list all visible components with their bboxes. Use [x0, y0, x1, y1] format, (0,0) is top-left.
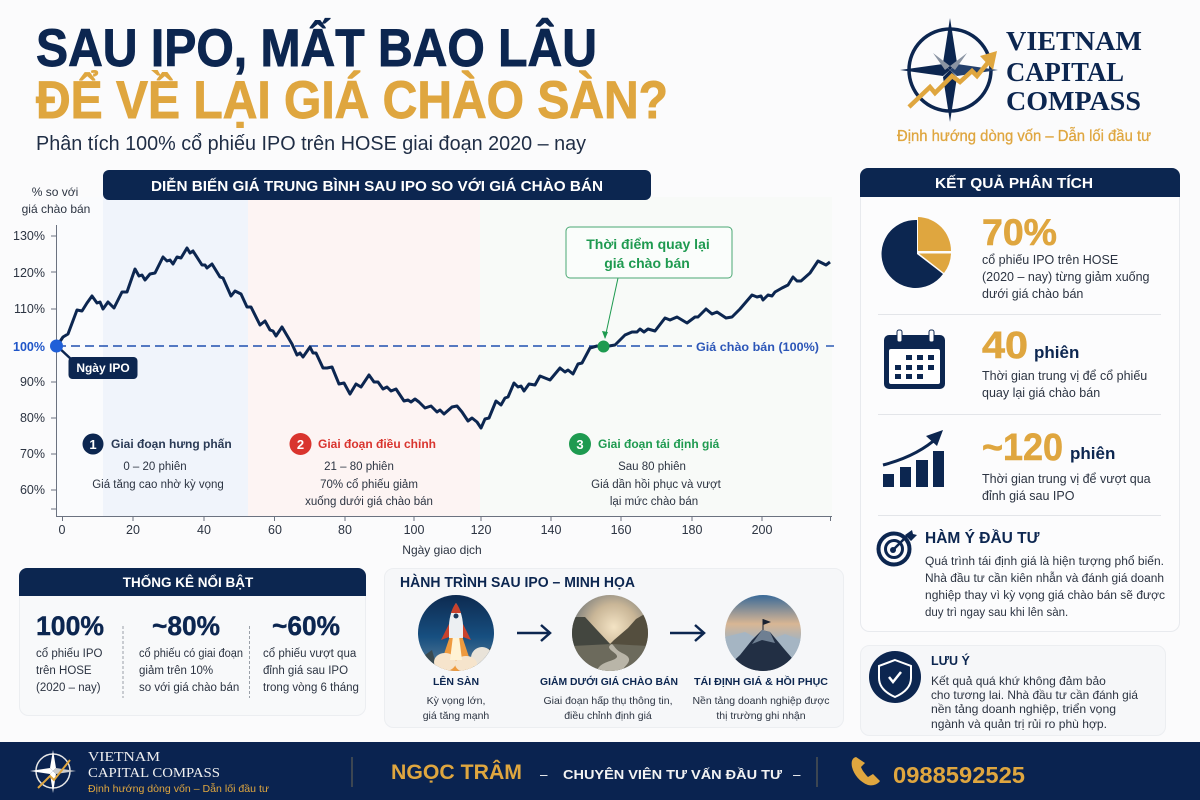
phase 2: xuống dưới giá chào bán — [305, 496, 433, 508]
x axis labels: 180 — [682, 523, 702, 537]
illustration: mountain summit flag — [722, 595, 804, 672]
y axis labels — [13, 229, 45, 497]
stat: 60%: ~60% — [272, 611, 340, 641]
stat: 80%: cổ phiếu có giai đoạn — [139, 648, 243, 660]
y axis title — [22, 185, 90, 216]
phone number: 0988592525 — [893, 762, 1025, 788]
step: revaluation and recovery: Nền tảng doanh nghiệp được — [692, 695, 830, 707]
phase 2: 70% cổ phiếu giảm — [320, 479, 418, 491]
step: listing: giá tăng mạnh — [423, 710, 489, 722]
icon: calendar — [884, 330, 945, 389]
findings heading: KẾT QUẢ PHÂN TÍCH — [935, 174, 1093, 192]
stat: 80%: giảm trên 10% — [139, 665, 213, 677]
investment implications: nghiệp thay vì kỳ vọng giá chào bán sẽ được — [925, 590, 1165, 602]
panel: disclaimer note: Kết quả quá khứ không đảm bảo — [931, 674, 1106, 688]
phase 3: Giá dần hồi phục và vượt — [591, 479, 722, 491]
stat: 60%: cổ phiếu vượt qua — [263, 648, 357, 660]
x axis labels: 20 — [126, 523, 140, 537]
x axis labels: 100 — [404, 523, 424, 537]
callout: return to offer price: giá chào bán — [604, 255, 690, 271]
marker: IPO day: Ngày IPO — [76, 361, 130, 375]
step: revaluation and recovery — [692, 675, 830, 722]
phase background bands — [57, 197, 832, 516]
illustration: valley road — [572, 595, 648, 672]
findings heading — [860, 168, 1180, 197]
logo: Vietnam Capital Compass — [897, 18, 1151, 145]
title: SAU IPO, MẤT BAO LÂU — [36, 17, 597, 78]
panel: disclaimer note: nền tảng doanh nghiệp, triển vọng — [931, 702, 1116, 716]
stat: 60% — [263, 611, 359, 694]
chart heading: DIỄN BIẾN GIÁ TRUNG BÌNH SAU IPO SO VỚI GIÁ CHÀO BÁN — [151, 177, 603, 195]
finding: 70%: (2020 – nay) từng giảm xuống — [982, 270, 1150, 284]
advisor role: CHUYÊN VIÊN TƯ VẤN ĐẦU TƯ — [563, 767, 782, 782]
stat: 60%: đỉnh giá sau IPO — [263, 665, 348, 677]
step: drop below offer price: GIẢM DƯỚI GIÁ CHÀO BÁN — [540, 675, 678, 688]
x axis labels: 60 — [268, 523, 282, 537]
investment implications — [878, 529, 1165, 619]
panel: post-IPO journey — [384, 568, 844, 728]
subtitle: Phân tích 100% cổ phiếu IPO trên HOSE giai đoạn 2020 – nay — [36, 133, 586, 155]
x axis labels: 160 — [611, 523, 631, 537]
finding: 120 sessions: phiên — [1070, 444, 1115, 463]
price line — [57, 248, 830, 428]
phase 3: 3 — [576, 437, 584, 452]
panel: highlighted statistics — [19, 568, 366, 716]
icon: compass with rising arrow — [900, 18, 998, 122]
finding: 40 sessions: Thời gian trung vị để cổ phiếu — [982, 369, 1147, 383]
x axis labels: 140 — [541, 523, 561, 537]
stat: 100%: (2020 – nay) — [36, 682, 101, 694]
finding: 70%: 70% — [982, 212, 1057, 253]
panel: disclaimer note: LƯU Ý — [931, 653, 971, 668]
x axis labels: 40 — [197, 523, 211, 537]
phase 1: 0 – 20 phiên — [123, 461, 187, 473]
x axis labels: 80 — [338, 523, 352, 537]
phase 3 — [569, 433, 722, 508]
x axis labels: 120 — [471, 523, 491, 537]
finding: 120 sessions — [883, 427, 1151, 503]
footer logo: VIETNAM — [88, 749, 160, 764]
finding: 40 sessions: 40 — [982, 325, 1028, 367]
statistics heading: THỐNG KÊ NỔI BẬT — [123, 575, 254, 590]
icon: shield — [869, 651, 921, 703]
stat: 80%: so với giá chào bán — [139, 682, 239, 694]
phase 1: Giá tăng cao nhờ kỳ vọng — [92, 479, 224, 491]
advisor role: – — [540, 767, 548, 782]
arrow — [670, 625, 704, 641]
icon: phone — [852, 757, 880, 785]
logo wordmark: VIETNAM — [1006, 26, 1142, 56]
icon: pie chart — [882, 217, 951, 288]
x axis labels: 0 — [59, 523, 66, 537]
logo wordmark — [1006, 26, 1142, 116]
phase 3: Giai đoạn tái định giá — [598, 437, 720, 451]
phase 3: lại mức chào bán — [610, 496, 698, 508]
investment implications: HÀM Ý ĐẦU TƯ — [925, 529, 1040, 547]
chart: average price after IPO — [13, 170, 834, 557]
logo wordmark: COMPASS — [1006, 86, 1141, 116]
footer logo — [30, 749, 269, 795]
y axis title: giá chào bán — [22, 202, 90, 216]
step: listing — [423, 675, 489, 722]
phase 3: Sau 80 phiên — [618, 461, 686, 473]
illustration: rocket launch — [418, 595, 494, 672]
callout: return to offer price: Thời điểm quay lại — [586, 236, 710, 252]
phase 1: 1 — [89, 437, 97, 452]
stat: 80%: ~80% — [152, 611, 220, 641]
step: listing: LÊN SÀN — [433, 675, 479, 688]
finding: 70%: cổ phiếu IPO trên HOSE — [982, 253, 1118, 267]
stat: 100% — [36, 611, 104, 694]
panel: disclaimer note: cho tương lai. Nhà đầu tư cần đánh giá — [931, 688, 1138, 702]
finding: 120 sessions: ~120 — [982, 427, 1063, 469]
panel: disclaimer note: ngành và quản trị rủi ro phù hợp. — [931, 717, 1107, 731]
step: drop below offer price: điều chỉnh định giá — [564, 710, 652, 722]
arrow — [517, 625, 550, 641]
marker: IPO day — [50, 340, 138, 379]
icon: target — [878, 530, 917, 564]
callout: return to offer price — [566, 227, 732, 352]
logo tagline: Định hướng dòng vốn – Dẫn lối đầu tư — [897, 128, 1151, 145]
stat: 100%: trên HOSE — [36, 665, 92, 677]
y axis labels: 100% — [13, 340, 45, 354]
y axis labels: 120% — [13, 266, 45, 280]
icon: footer compass — [30, 750, 76, 793]
finding: 40 sessions: phiên — [1034, 343, 1079, 362]
axes — [51, 225, 832, 521]
title: ĐỂ VỀ LẠI GIÁ CHÀO SÀN? — [36, 70, 668, 130]
phase 2 — [290, 433, 436, 508]
finding: 120 sessions: Thời gian trung vị để vượt qua — [982, 472, 1151, 486]
step: drop below offer price: Giai đoạn hấp thụ thông tin, — [543, 695, 673, 707]
phase 2: 21 – 80 phiên — [324, 461, 394, 473]
offer price reference line: Giá chào bán (100%) — [696, 340, 819, 354]
stat: 60%: trong vòng 6 tháng — [263, 682, 359, 694]
step: revaluation and recovery: TÁI ĐỊNH GIÁ & HỒI PHỤC — [694, 675, 828, 688]
footer logo: Định hướng dòng vốn – Dẫn lối đầu tư — [88, 782, 269, 795]
stat: 100%: cổ phiếu IPO — [36, 648, 103, 660]
finding: 70% — [882, 212, 1150, 301]
finding: 120 sessions: đỉnh giá sau IPO — [982, 489, 1075, 503]
finding: 70%: dưới giá chào bán — [982, 287, 1083, 301]
stat: 80% — [139, 611, 243, 694]
y axis labels: 130% — [13, 229, 45, 243]
y axis labels: 90% — [20, 375, 45, 389]
phase 1: Giai đoạn hưng phấn — [111, 437, 232, 451]
chart heading — [103, 170, 651, 200]
title — [36, 17, 668, 130]
panel: disclaimer note — [860, 646, 1166, 736]
y axis labels: 70% — [20, 447, 45, 461]
advisor name: NGỌC TRÂM — [391, 760, 522, 784]
investment implications: duy trì ngay sau khi lên sàn. — [925, 607, 1068, 619]
y axis title: % so với — [32, 185, 78, 199]
logo wordmark: CAPITAL — [1006, 57, 1124, 87]
footer logo: CAPITAL COMPASS — [88, 765, 220, 780]
footer bar — [0, 742, 1200, 800]
statistics heading — [19, 568, 366, 596]
advisor role: – — [793, 767, 801, 782]
y axis labels: 110% — [14, 302, 45, 316]
icon: rising bars — [883, 430, 944, 487]
finding: 40 sessions: quay lại giá chào bán — [982, 386, 1100, 400]
step: revaluation and recovery: thị trường ghi nhận — [716, 710, 806, 722]
stat: 100%: 100% — [36, 611, 104, 641]
panel: key findings — [860, 168, 1180, 632]
step: drop below offer price — [540, 675, 678, 722]
y axis labels: 80% — [20, 411, 45, 425]
finding: 40 sessions — [884, 325, 1147, 400]
phase 2: Giai đoạn điều chỉnh — [318, 437, 436, 451]
journey heading: HÀNH TRÌNH SAU IPO – MINH HỌA — [400, 574, 635, 591]
phase 1 — [82, 434, 232, 491]
phase 2: 2 — [297, 437, 304, 452]
x axis title: Ngày giao dịch — [402, 543, 482, 557]
step: listing: Kỳ vọng lớn, — [427, 695, 485, 707]
x axis labels — [59, 523, 772, 537]
investment implications: Nhà đầu tư cần kiên nhẫn và đánh giá doanh — [925, 572, 1164, 585]
y axis labels: 60% — [20, 483, 45, 497]
x axis labels: 200 — [752, 523, 772, 537]
investment implications: Quá trình tái định giá là hiện tượng phổ biến. — [925, 556, 1164, 568]
